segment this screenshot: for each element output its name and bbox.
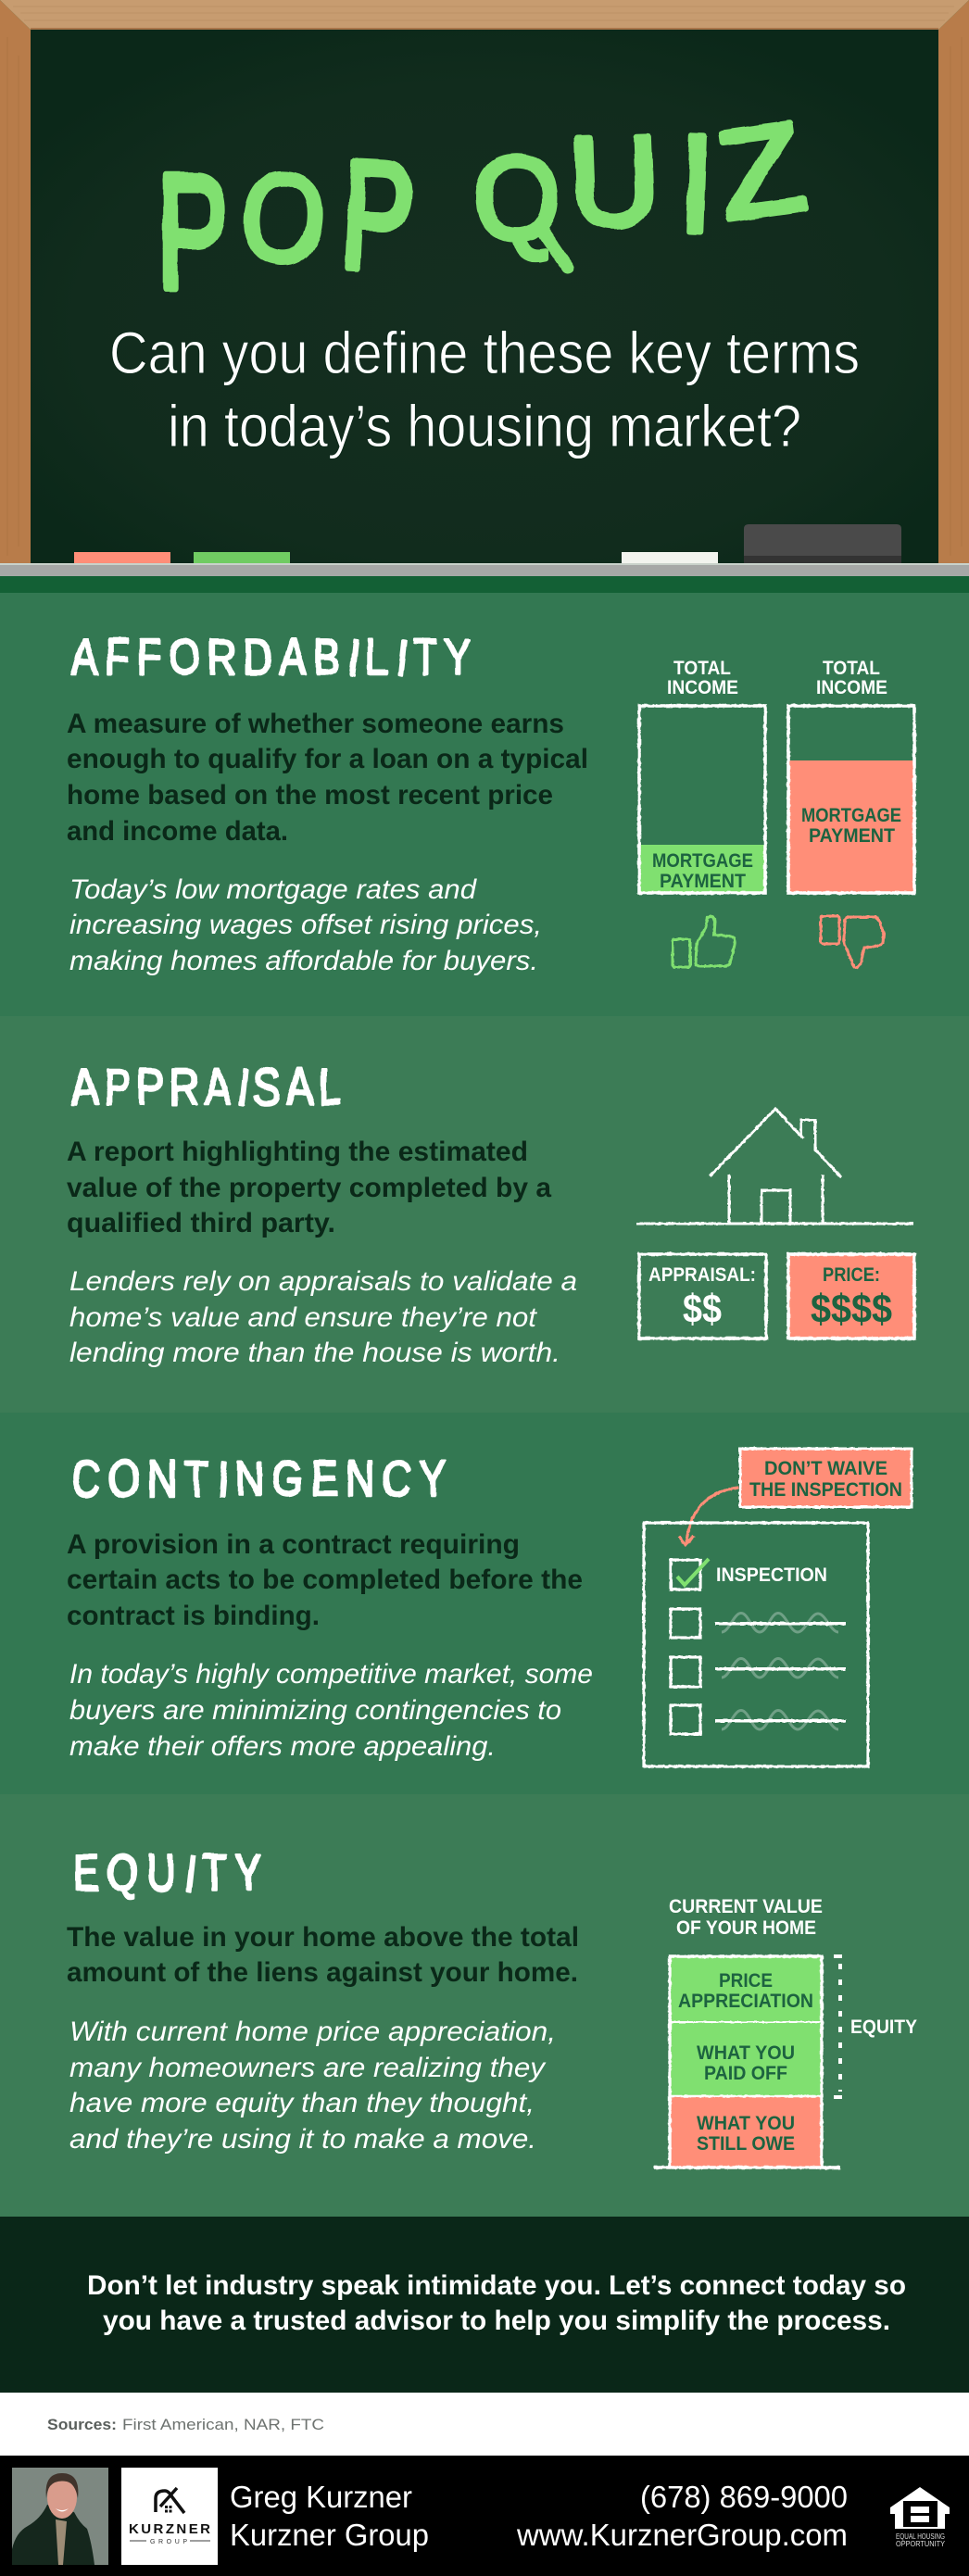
chalk: green	[194, 552, 290, 563]
checkbox: inspection	[671, 1559, 827, 1590]
chart: affordable income box: PAYMENT	[660, 871, 746, 892]
logo mark	[156, 2488, 184, 2513]
checklist	[644, 1523, 868, 1766]
icon: equal housing opportunity	[890, 2487, 950, 2548]
note text: lending more than the house is worth.	[69, 1338, 560, 1368]
definition text: home based on the most recent price	[67, 780, 553, 810]
chalkboard header	[0, 0, 969, 593]
agent name: Greg Kurzner	[230, 2480, 412, 2514]
definition text	[67, 1922, 579, 1988]
definition text	[67, 1529, 583, 1631]
note text: increasing wages offset rising prices,	[69, 910, 542, 940]
stack fills	[670, 1956, 822, 2168]
definition text: A provision in a contract requiring	[67, 1529, 520, 1560]
callout: don't waive the inspection: THE INSPECTION	[749, 1479, 902, 1501]
note text: With current home price appreciation,	[69, 2017, 556, 2047]
chalkboard surface	[31, 30, 938, 563]
panel: appraisal	[0, 1016, 969, 1413]
chart: unaffordable income box: MORTGAGE	[801, 805, 901, 826]
checkbox: inspection: INSPECTION	[716, 1564, 827, 1586]
title: POP QUIZ: Z	[710, 95, 812, 247]
title: POP QUIZ: U	[567, 107, 662, 254]
agent photo	[12, 2468, 108, 2565]
icon: thumbs up	[673, 917, 735, 967]
definition text: contract is binding.	[67, 1601, 320, 1631]
panel: equity	[0, 1794, 969, 2217]
chart title	[669, 1896, 823, 1939]
title: POP QUIZ: O	[234, 144, 333, 293]
note text: many homeowners are realizing they	[69, 2053, 547, 2083]
box: price: PRICE:	[823, 1264, 880, 1286]
icon: house	[636, 1109, 913, 1224]
definition text: enough to qualify for a loan on a typical	[67, 744, 588, 774]
chart: affordable income box: MORTGAGE	[652, 850, 753, 872]
call to action band: you have a trusted advisor to help you simplify the process.	[103, 2306, 890, 2336]
definition text: A measure of whether someone earns	[67, 709, 564, 739]
callout: don't waive the inspection	[740, 1449, 912, 1507]
chart: unaffordable income box	[788, 658, 914, 893]
callout: don't waive the inspection: DON’T WAIVE	[764, 1458, 887, 1479]
sources: Sources:	[47, 2416, 117, 2433]
chart: affordable income box: INCOME	[667, 677, 738, 698]
call to action band	[0, 2217, 969, 2393]
definition text: and income data.	[67, 816, 288, 847]
note text	[69, 1266, 577, 1368]
subtitle: Can you define these key terms	[109, 320, 860, 386]
segment: price appreciation	[678, 1970, 813, 2012]
definition text: The value in your home above the total	[67, 1922, 579, 1953]
chart: affordable income box: TOTAL	[673, 658, 731, 679]
definition text	[67, 1137, 551, 1238]
title: POP QUIZ: Q	[473, 133, 560, 264]
heading: AFFORDABILITY	[71, 628, 472, 687]
definition text	[67, 709, 588, 847]
chart: unaffordable income box: PAYMENT	[809, 825, 895, 847]
segment: what you still owe	[697, 2113, 795, 2155]
contact details	[516, 2480, 848, 2552]
checklist row 4	[671, 1705, 846, 1734]
company logo: GROUP	[150, 2539, 187, 2545]
contact details: (678) 869-9000	[640, 2480, 848, 2514]
title: POP QUIZ: P	[338, 129, 418, 304]
title: POP QUIZ	[157, 95, 812, 323]
chart: unaffordable income box: TOTAL	[823, 658, 880, 679]
box: price	[788, 1254, 914, 1338]
panel: contingency	[0, 1413, 969, 1794]
note text: making homes affordable for buyers.	[69, 946, 538, 976]
heading: CONTINGENCY	[71, 1450, 447, 1509]
heading: APPRAISAL	[71, 1058, 341, 1117]
box: appraisal value: APPRAISAL:	[648, 1264, 756, 1286]
note text	[69, 2017, 556, 2155]
note text	[69, 874, 542, 976]
company logo	[121, 2468, 218, 2565]
definition text: qualified third party.	[67, 1208, 335, 1238]
definition text: certain acts to be completed before the	[67, 1564, 583, 1595]
checklist row 3	[671, 1657, 846, 1687]
panel: affordability	[0, 593, 969, 1016]
checklist row 2	[671, 1609, 846, 1638]
note text: make their offers more appealing.	[69, 1731, 496, 1762]
note text: have more equity than they thought,	[69, 2088, 535, 2118]
segment: what you paid off	[697, 2042, 795, 2084]
box: appraisal value	[639, 1254, 766, 1338]
definition text: amount of the liens against your home.	[67, 1957, 578, 1988]
icon: equal housing opportunity: EQUAL HOUSING	[896, 2532, 945, 2541]
definition text: value of the property completed by a	[67, 1173, 551, 1203]
company logo: KURZNER	[129, 2521, 210, 2537]
chalk: red	[74, 552, 170, 563]
title: POP QUIZ: P	[157, 143, 228, 323]
box: appraisal value: $$	[683, 1287, 722, 1332]
note text: In today’s highly competitive market, some	[69, 1659, 593, 1690]
contact details: www.KurznerGroup.com	[516, 2518, 848, 2552]
call to action band: Don’t let industry speak intimidate you. Let’s connect today so	[87, 2270, 906, 2301]
segment: what you still owe: WHAT YOU	[697, 2113, 795, 2134]
equity bracket: EQUITY	[850, 2017, 917, 2038]
arrow	[679, 1488, 738, 1545]
segment: price appreciation: APPRECIATION	[678, 1991, 813, 2012]
subtitle	[109, 320, 860, 459]
note text: and they’re using it to make a move.	[69, 2124, 536, 2155]
chart title: CURRENT VALUE	[669, 1896, 823, 1917]
subtitle: in today’s housing market?	[168, 393, 801, 459]
sources	[0, 2393, 969, 2456]
icon: equal housing opportunity: OPPORTUNITY	[896, 2540, 946, 2548]
segment: what you still owe: STILL OWE	[697, 2133, 795, 2155]
segment: price appreciation: PRICE	[719, 1970, 773, 1992]
note text: buyers are minimizing contingencies to	[69, 1695, 561, 1726]
segment: what you paid off: WHAT YOU	[697, 2042, 795, 2064]
chart: home value stack	[654, 1896, 917, 2168]
agent name	[230, 2480, 429, 2552]
note text: Today’s low mortgage rates and	[69, 874, 477, 905]
segment: what you paid off: PAID OFF	[704, 2063, 787, 2084]
heading: EQUITY	[72, 1843, 262, 1903]
title: POP QUIZ: I	[677, 106, 716, 262]
chart: affordable income box	[639, 658, 765, 893]
note text	[69, 1659, 593, 1762]
chalk tray	[0, 563, 969, 576]
equity bracket	[834, 1956, 917, 2097]
note text: Lenders rely on appraisals to validate a	[69, 1266, 577, 1297]
note text: home’s value and ensure they’re not	[69, 1302, 538, 1333]
eraser	[744, 524, 901, 563]
stack outlines	[654, 1956, 840, 2168]
chalk: white	[622, 552, 718, 563]
agent name: Kurzner Group	[230, 2518, 429, 2552]
chart: unaffordable income box: INCOME	[816, 677, 887, 698]
chart title: OF YOUR HOME	[676, 1917, 816, 1939]
sources: First American, NAR, FTC	[122, 2416, 324, 2433]
icon: thumbs down	[821, 916, 884, 967]
footer: agent contact bar	[0, 2456, 969, 2576]
definition text: A report highlighting the estimated	[67, 1137, 528, 1167]
box: price: $$$$	[811, 1287, 892, 1332]
wooden frame	[0, 0, 969, 563]
